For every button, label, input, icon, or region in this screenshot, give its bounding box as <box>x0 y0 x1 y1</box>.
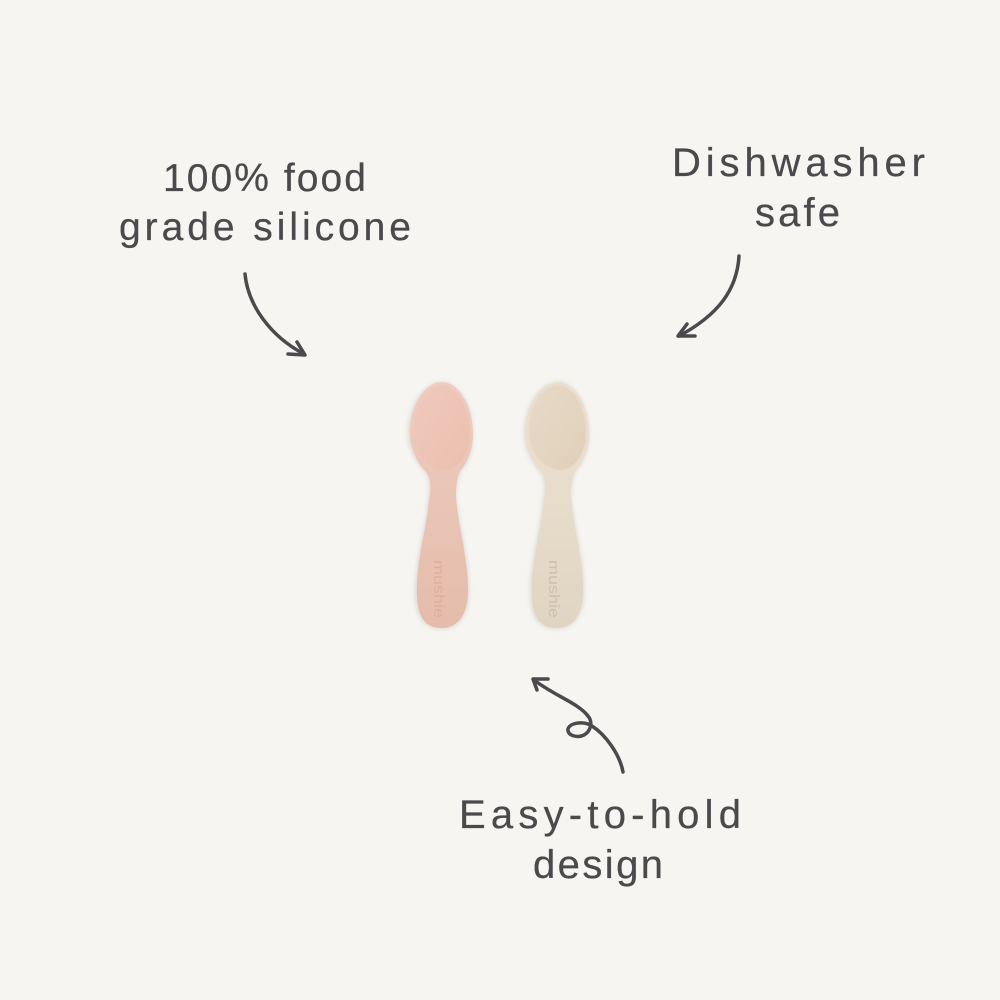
arrow: curly arrow from easy-to-hold callout to spoons <box>533 679 623 772</box>
spoon shadow <box>524 382 589 629</box>
callout: Easy-to-hold design: design <box>533 843 663 887</box>
arrow: dishwasher callout to spoons <box>678 256 739 336</box>
spoon bowl <box>529 385 586 470</box>
embossed logo: mushie <box>545 560 562 618</box>
callout: Dishwasher safe <box>672 141 925 235</box>
embossed logo: mushie <box>430 560 447 618</box>
callout: Dishwasher safe: Dishwasher <box>672 141 925 185</box>
spoon body <box>526 382 589 628</box>
spoon bowl <box>413 385 470 470</box>
spoon: blush <box>408 382 473 629</box>
arrow: silicone callout to spoons <box>245 274 305 355</box>
callout: Easy-to-hold design <box>459 793 741 887</box>
spoon body <box>410 382 473 628</box>
callout: Easy-to-hold design: Easy-to-hold <box>459 793 741 837</box>
spoon: cream <box>524 382 589 629</box>
spoon shadow <box>408 382 473 629</box>
callout: Dishwasher safe: safe <box>755 191 840 235</box>
callout: 100% food grade silicone: 100% food <box>163 157 366 200</box>
callout: 100% food grade silicone <box>119 157 411 249</box>
callout: 100% food grade silicone: grade silicone <box>119 206 411 249</box>
